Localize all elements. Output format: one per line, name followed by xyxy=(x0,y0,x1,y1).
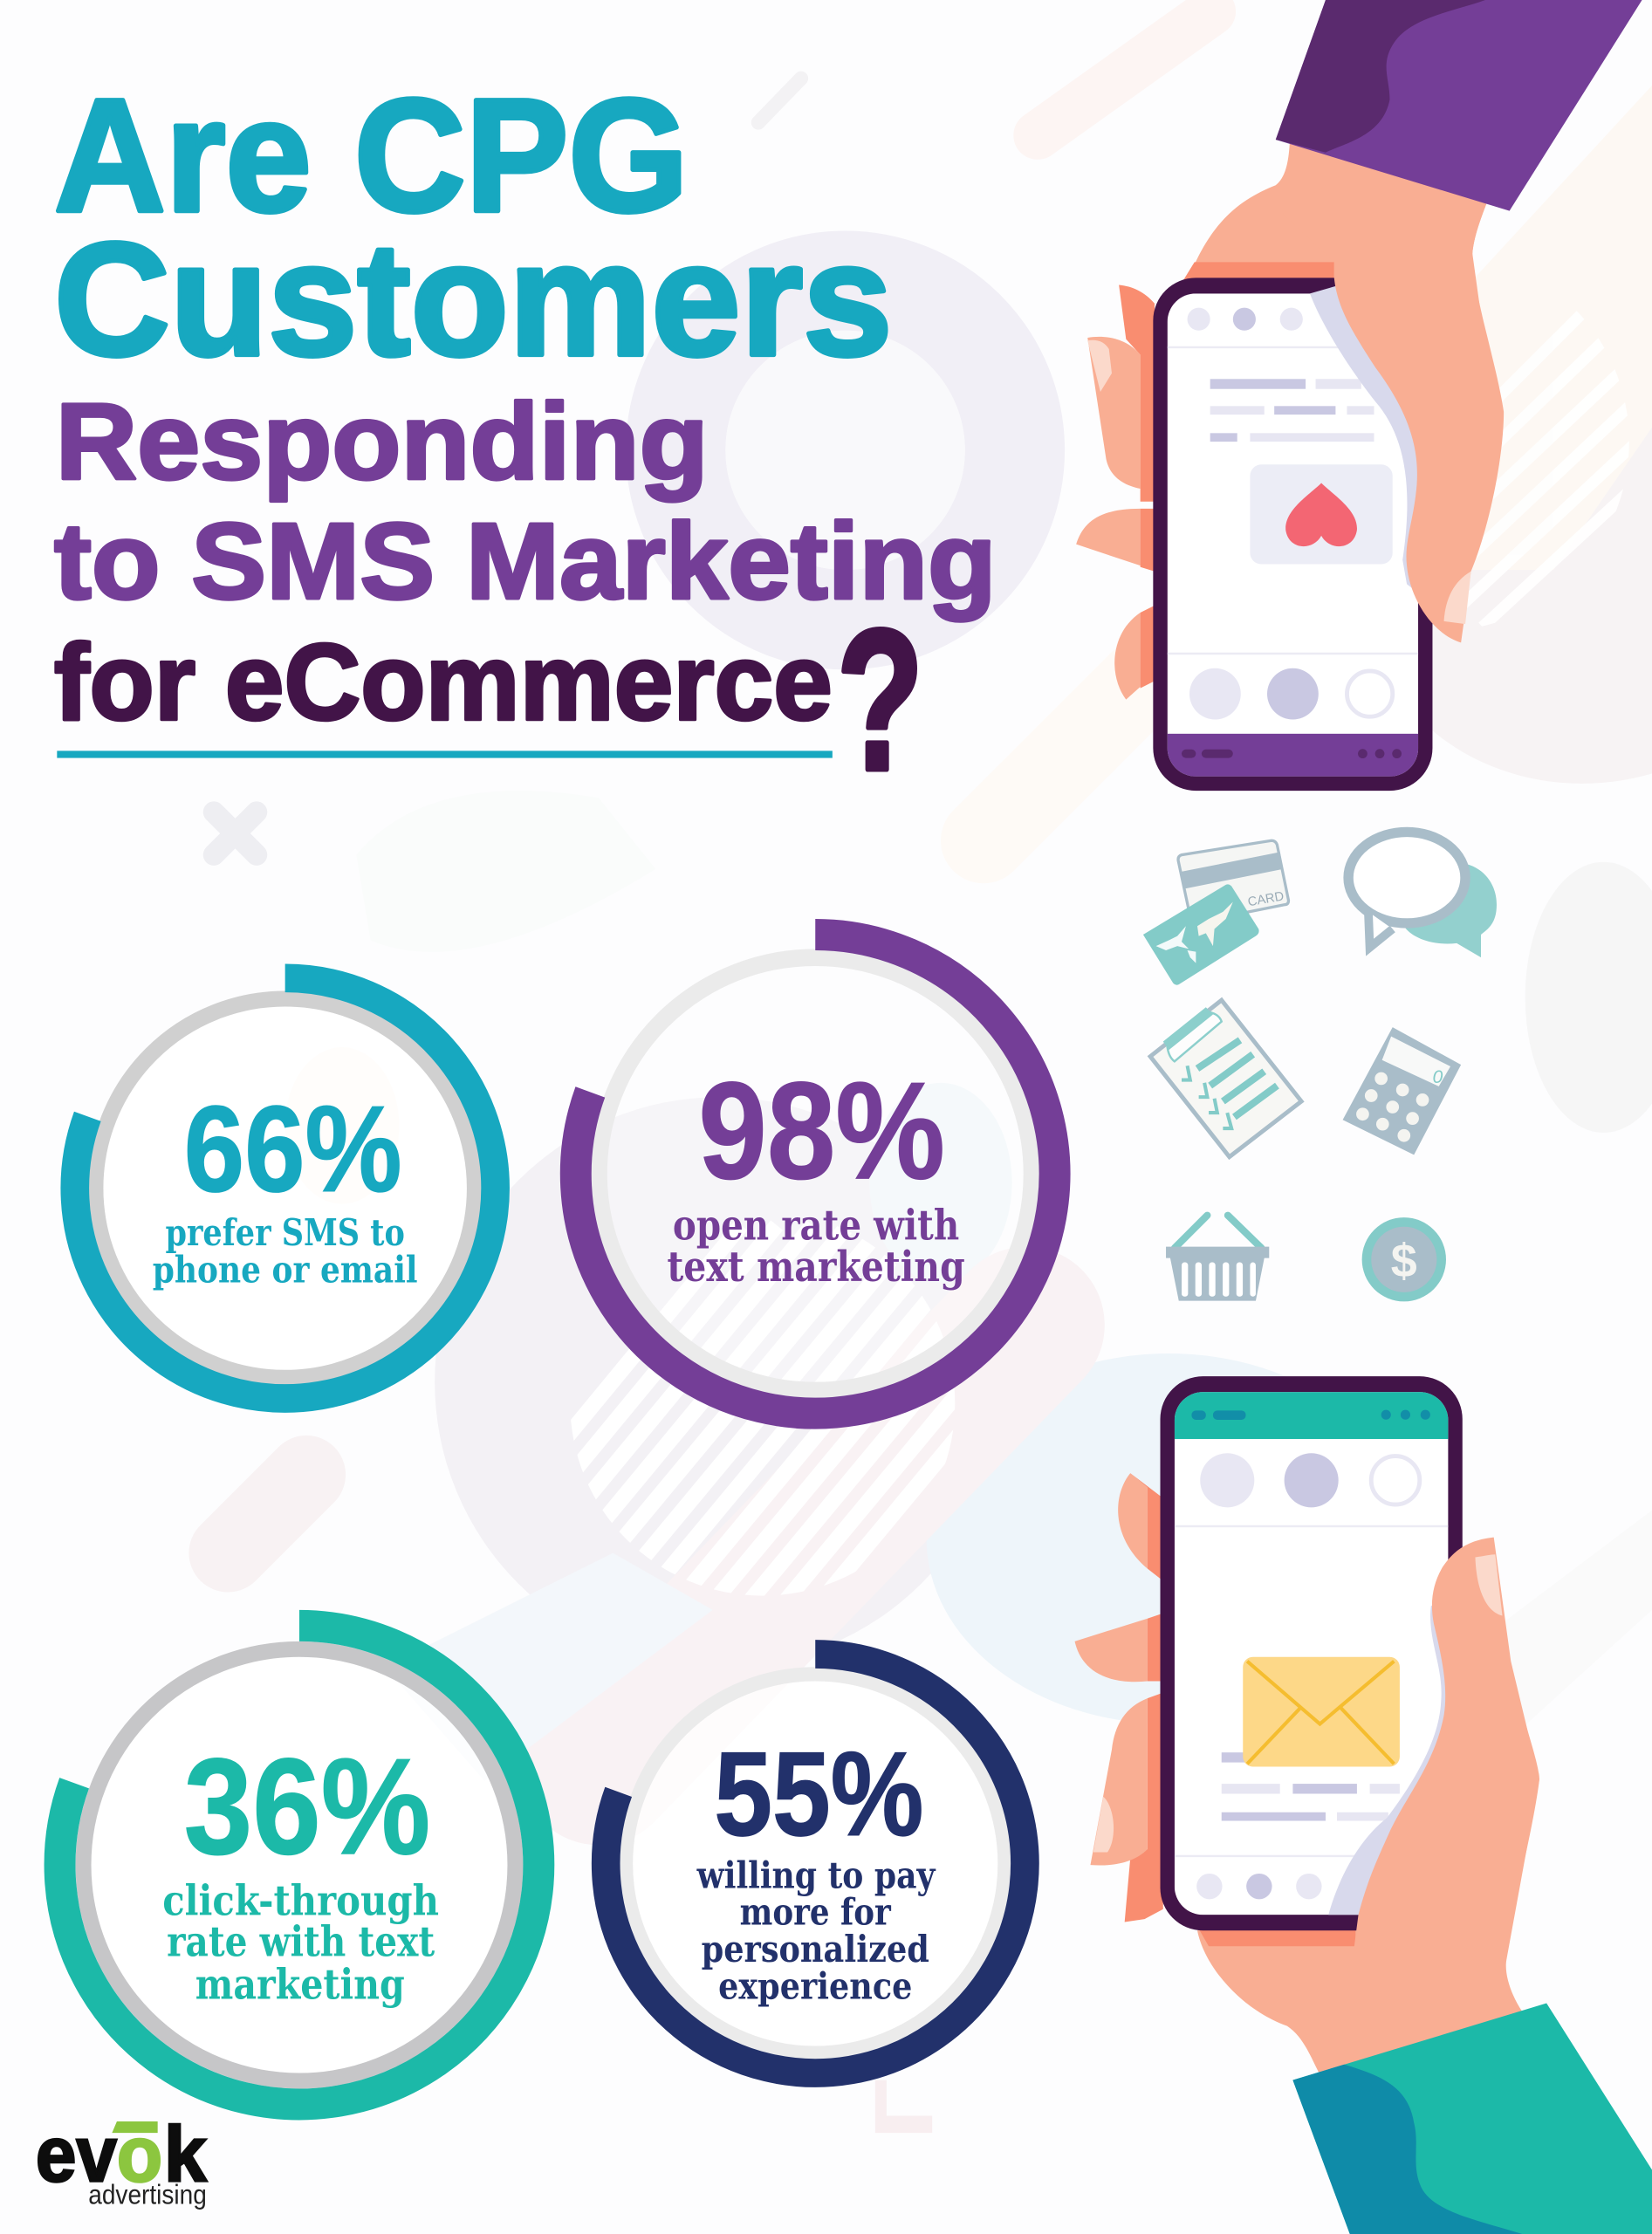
caption: willing to pay xyxy=(696,1854,936,1897)
caption: personalized xyxy=(702,1928,929,1971)
stat ring: 36% xyxy=(60,1626,538,2104)
title line: Customers: Customers xyxy=(54,210,892,390)
fingers behind phone xyxy=(1075,1473,1163,1922)
thumb shadow xyxy=(1328,1606,1454,1915)
phone body xyxy=(1153,278,1432,791)
sleeve: teal xyxy=(1292,2004,1652,2234)
hand back xyxy=(1189,131,1497,428)
question mark: ? xyxy=(837,588,923,812)
title line: to SMS Marketing: to SMS Marketing xyxy=(54,502,997,622)
title underline xyxy=(57,750,833,758)
caption: more for xyxy=(740,1891,891,1935)
caption: click-through xyxy=(162,1877,439,1925)
title line: Responding: Responding xyxy=(56,382,709,503)
fingers behind phone xyxy=(1076,285,1155,700)
caption: open rate with xyxy=(673,1202,959,1250)
caption: prefer SMS to xyxy=(165,1211,405,1255)
caption xyxy=(696,1854,936,2009)
icon: dollar coin xyxy=(1362,1217,1446,1301)
thumb shadow xyxy=(1310,285,1425,599)
caption: phone or email xyxy=(153,1248,418,1292)
caption: experience xyxy=(718,1965,912,2009)
logo tagline: advertising xyxy=(88,2180,207,2210)
thumb nail xyxy=(1444,572,1471,624)
title line: for eCommerce: for eCommerce xyxy=(54,623,833,743)
title line: Are CPG: Are CPG xyxy=(54,66,689,246)
title xyxy=(54,66,997,812)
icon: dollar coin: $ xyxy=(1391,1235,1417,1287)
caption: rate with text xyxy=(167,1919,435,1967)
caption xyxy=(667,1202,965,1292)
palm shadow band xyxy=(1197,1926,1355,1946)
phone screen xyxy=(1175,1392,1448,1915)
icon: calculator xyxy=(1343,1027,1461,1155)
logo wordmark: o xyxy=(117,2112,162,2199)
phone body xyxy=(1161,1376,1463,1930)
palm xyxy=(1197,1662,1539,2074)
icon: calculator: 0 xyxy=(1432,1067,1443,1087)
stat ring: 55% xyxy=(606,1655,1025,2073)
phone screen xyxy=(1168,293,1418,777)
icons group xyxy=(1143,832,1497,1301)
logo bar xyxy=(112,2121,158,2133)
logo wordmark: k xyxy=(164,2112,208,2199)
caption: marketing xyxy=(195,1962,405,2010)
icon: heart xyxy=(1285,483,1357,546)
icon: shopping basket xyxy=(1166,1216,1269,1301)
value 36%: 36% xyxy=(184,1730,430,1883)
caption xyxy=(162,1877,439,2010)
icon: clipboard checklist xyxy=(1150,1000,1301,1157)
caption xyxy=(153,1211,418,1292)
icon: credit cards: CARD xyxy=(1247,889,1285,909)
thumb xyxy=(1283,157,1504,642)
caption: text marketing xyxy=(667,1244,965,1292)
thumb xyxy=(1354,1538,1539,1959)
value 55%: 55% xyxy=(714,1728,923,1861)
value 66%: 66% xyxy=(184,1080,402,1217)
icon: credit cards xyxy=(1143,840,1289,985)
logo: evok advertising xyxy=(36,2112,208,2210)
icon: chat bubbles xyxy=(1348,832,1497,957)
logo wordmark: ev xyxy=(36,2112,117,2199)
icon: envelope xyxy=(1243,1657,1400,1766)
stat ring: 66% xyxy=(75,978,496,1398)
phone in hand: top xyxy=(1076,0,1642,791)
sleeve: purple xyxy=(1276,0,1642,211)
stat ring: 98% xyxy=(576,935,1055,1414)
palm shadow band xyxy=(1183,262,1334,281)
thumb nail xyxy=(1475,1554,1503,1615)
phone in hand: bottom xyxy=(1075,1376,1652,2234)
value 98%: 98% xyxy=(698,1053,945,1208)
